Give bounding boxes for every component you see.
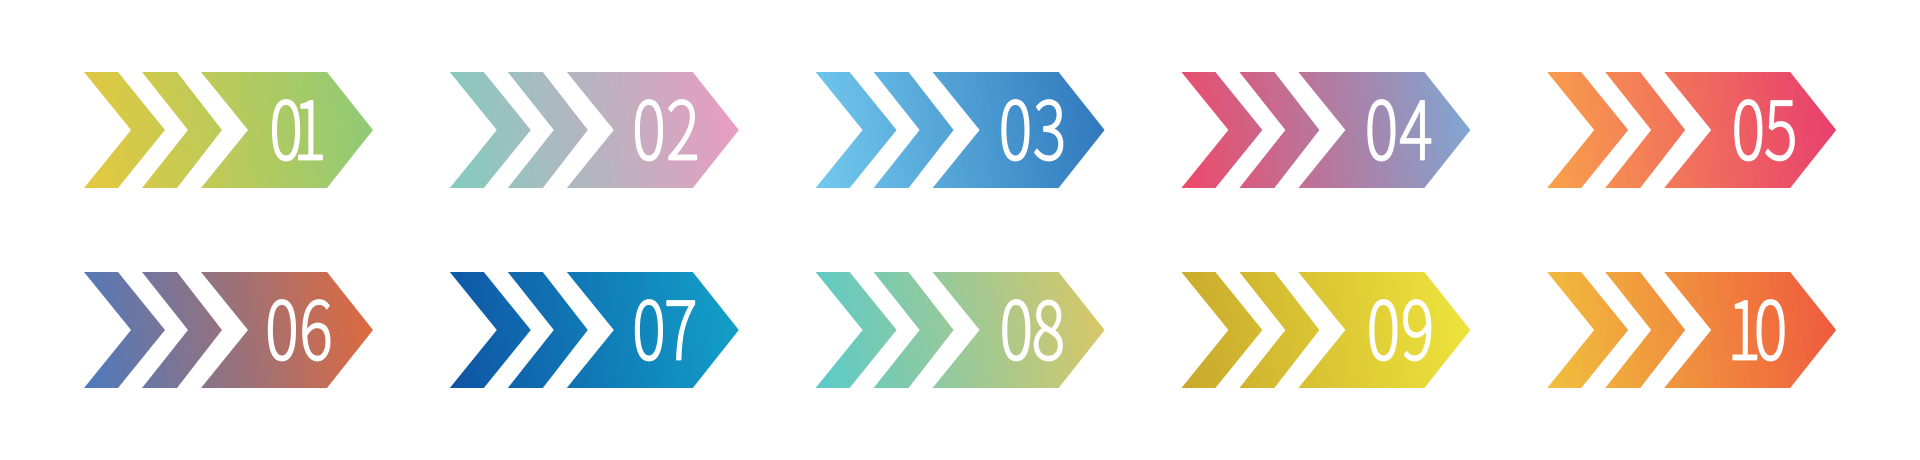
arrow badge 09	[1181, 267, 1470, 388]
chevrons and arrow body 04	[1181, 72, 1470, 188]
number 07: 07	[632, 267, 697, 383]
chevrons and arrow body 06	[84, 272, 373, 388]
number 08: 08	[1000, 267, 1065, 383]
arrow badge 08	[816, 267, 1105, 388]
chevrons and arrow body 08	[816, 272, 1105, 388]
arrow badge 07	[450, 267, 739, 388]
arrow badge 10	[1547, 267, 1836, 388]
arrow badge 06	[84, 267, 373, 388]
chevrons and arrow body 02	[450, 72, 739, 188]
number 06: 06	[265, 267, 333, 383]
arrow badge 03	[816, 67, 1105, 188]
number 09: 09	[1367, 267, 1434, 383]
arrow badge 05	[1547, 67, 1836, 188]
arrow badge 04	[1181, 67, 1470, 188]
number 10: 10	[1727, 267, 1787, 383]
chevrons and arrow body 09	[1181, 272, 1470, 388]
chevrons and arrow body 03	[816, 72, 1105, 188]
number 03: 03	[999, 67, 1066, 183]
chevrons and arrow body 07	[450, 272, 739, 388]
number 04: 04	[1365, 67, 1433, 183]
number 02: 02	[632, 67, 700, 183]
arrow badge 02	[450, 67, 739, 188]
chevrons and arrow body 05	[1547, 72, 1836, 188]
arrow badge 01	[84, 67, 373, 188]
number 01: 01	[269, 67, 326, 183]
number 05: 05	[1732, 67, 1798, 183]
chevrons and arrow body 01	[84, 72, 373, 188]
chevrons and arrow body 10	[1547, 272, 1836, 388]
